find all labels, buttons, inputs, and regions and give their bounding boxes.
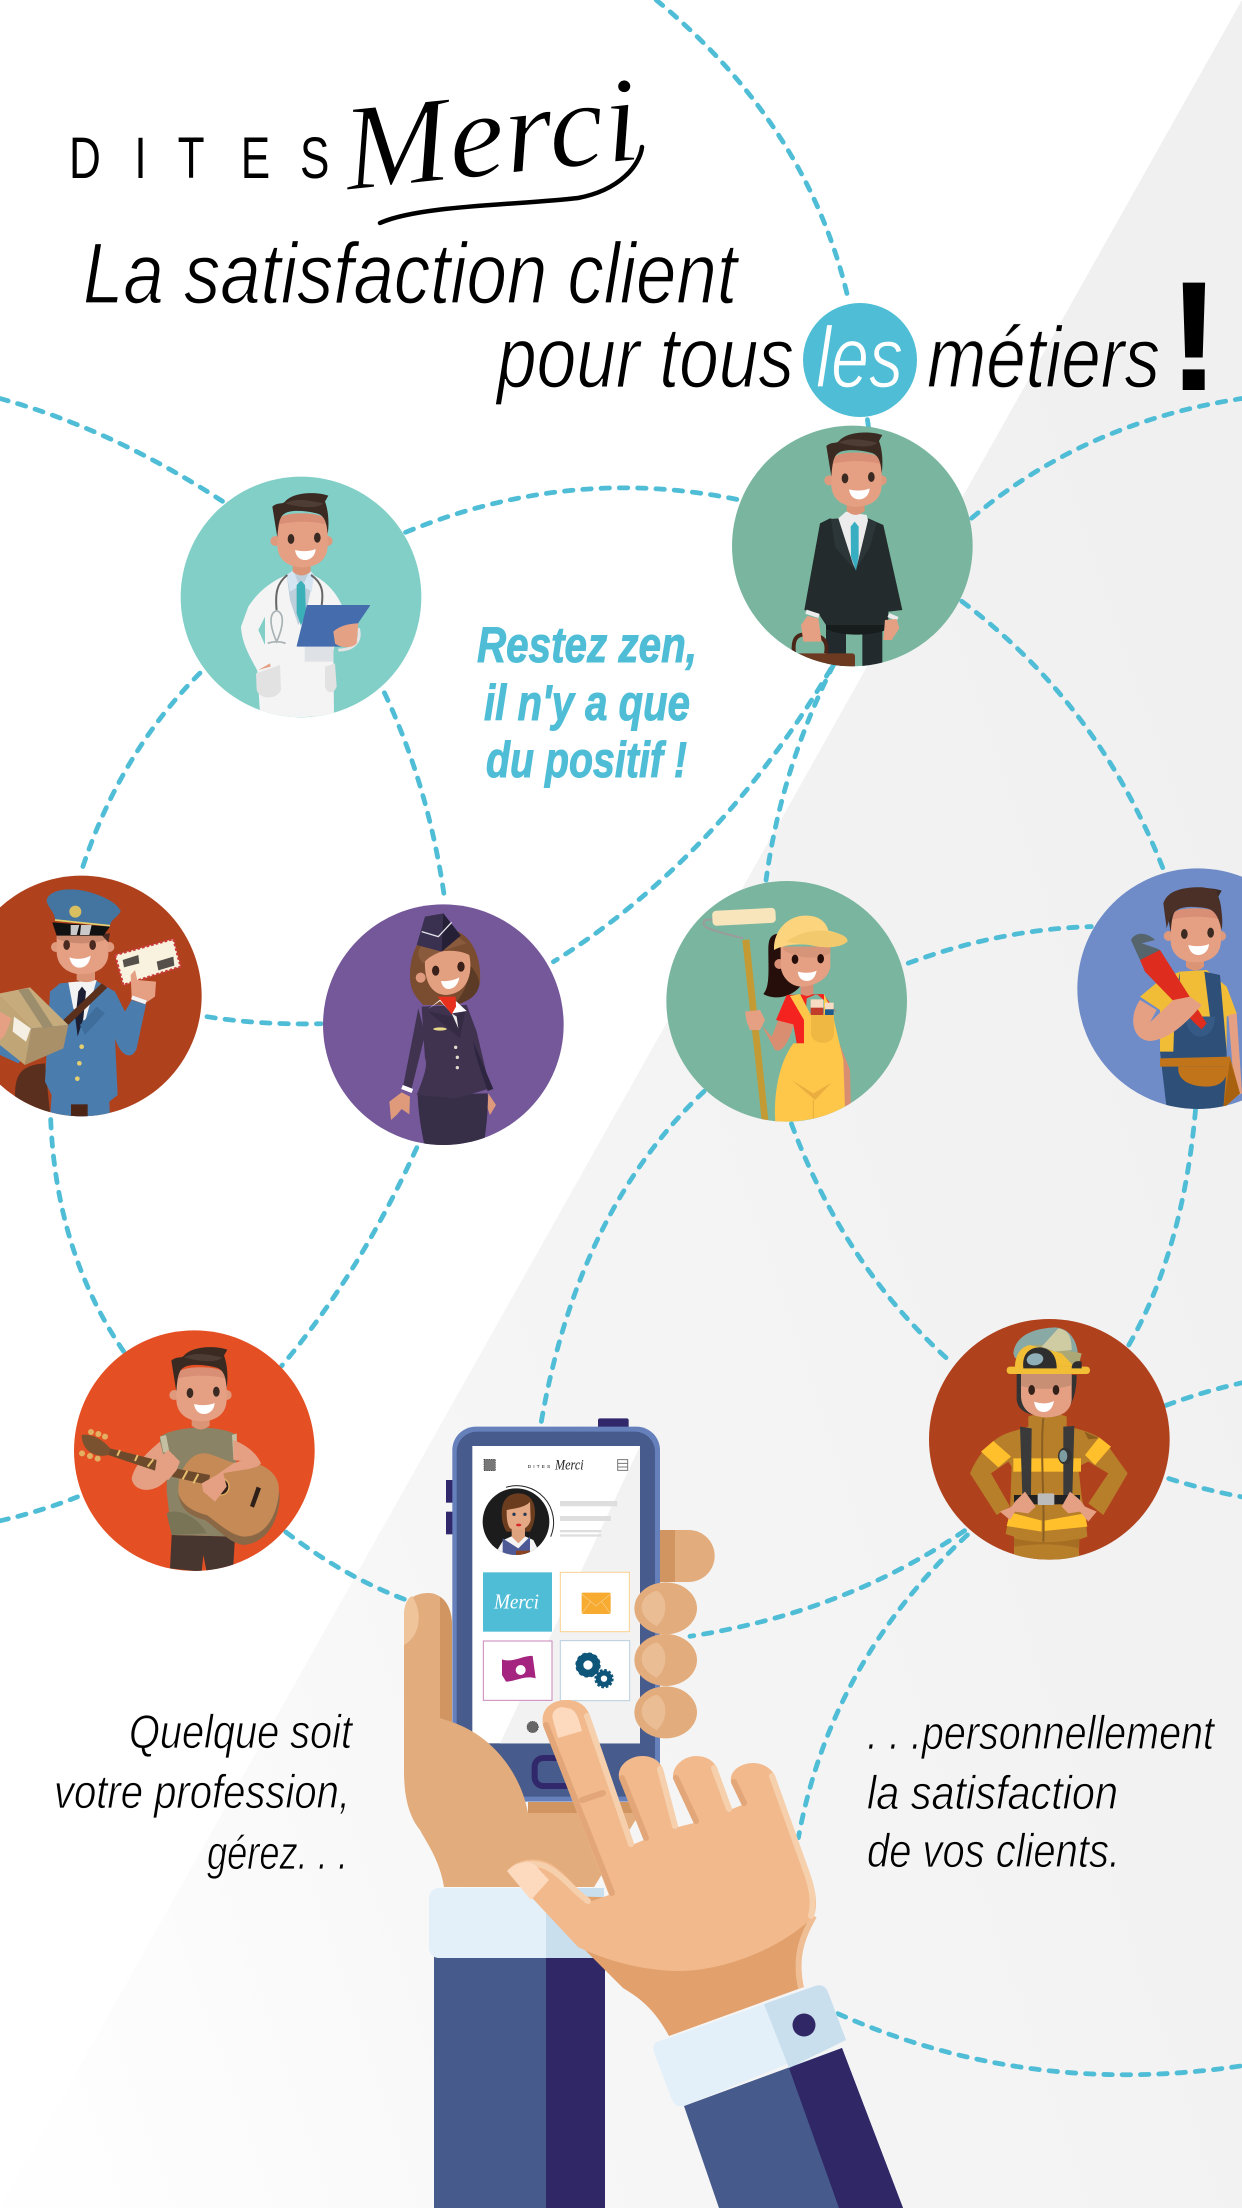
right caption	[867, 1706, 1216, 1877]
right cuff	[653, 1985, 846, 2106]
app logo	[528, 1457, 584, 1473]
les bubble	[803, 303, 917, 417]
finger 2	[634, 1634, 697, 1686]
app logo: DITES	[528, 1464, 552, 1470]
menu icon	[618, 1460, 628, 1470]
title: Dites Merci logo	[69, 52, 645, 223]
tile: merci: Merci	[493, 1591, 539, 1613]
right caption: de vos clients.	[867, 1824, 1120, 1877]
merci swash	[380, 147, 642, 223]
profile photo	[483, 1486, 554, 1557]
title line 2: pour tous	[495, 310, 794, 406]
tile: message	[560, 1572, 629, 1632]
right sleeve	[653, 1985, 903, 2208]
left caption: Quelque soit	[129, 1705, 354, 1758]
slogan: Restez zen: Restez zen,	[477, 617, 697, 673]
exclamation mark: !	[1168, 250, 1220, 424]
slogan: Restez zen: il n'y a que	[484, 675, 690, 731]
finger 1	[634, 1582, 697, 1634]
screen	[472, 1446, 640, 1743]
phone	[446, 1418, 715, 1802]
app logo: Merci	[554, 1457, 584, 1473]
holding finger behind phone	[653, 1530, 715, 1582]
tile: settings	[560, 1641, 630, 1701]
fingers around phone	[634, 1582, 697, 1738]
flight attendant	[323, 904, 564, 1148]
plumber	[1077, 868, 1242, 1112]
painter	[666, 881, 907, 1123]
title line 1: La satisfaction client	[83, 226, 740, 322]
right hand pointing	[507, 1700, 816, 2036]
finger 3	[634, 1686, 697, 1738]
left caption: gérez. . .	[207, 1826, 348, 1879]
title metiers: métiers	[927, 310, 1160, 406]
slogan: Restez zen: du positif !	[486, 732, 687, 788]
guitarist	[74, 1330, 315, 1572]
qr code	[484, 1459, 495, 1471]
phone buttons	[446, 1418, 629, 1534]
merci script: Merci	[335, 52, 645, 217]
finger shading	[515, 1716, 813, 1916]
cuff button	[792, 2014, 816, 2036]
businessman	[732, 426, 973, 670]
left caption: votre profession,	[54, 1765, 350, 1818]
slogan: Restez zen	[477, 617, 697, 788]
postman	[0, 876, 202, 1118]
left caption	[54, 1705, 354, 1879]
profile text placeholders	[560, 1501, 617, 1537]
left hand holding phone	[404, 1593, 640, 1887]
tile: merci	[483, 1572, 552, 1632]
right caption: la satisfaction	[867, 1766, 1118, 1819]
phone body	[452, 1427, 660, 1802]
home button	[535, 1758, 574, 1786]
les bubble: les	[816, 310, 903, 406]
nails	[552, 1707, 582, 1738]
tile: money	[483, 1641, 552, 1700]
dites letters: DITES	[69, 125, 329, 190]
left sleeve	[429, 1888, 605, 2208]
footer logo dot	[527, 1721, 538, 1733]
doctor	[181, 477, 421, 717]
firefighter	[929, 1319, 1170, 1562]
